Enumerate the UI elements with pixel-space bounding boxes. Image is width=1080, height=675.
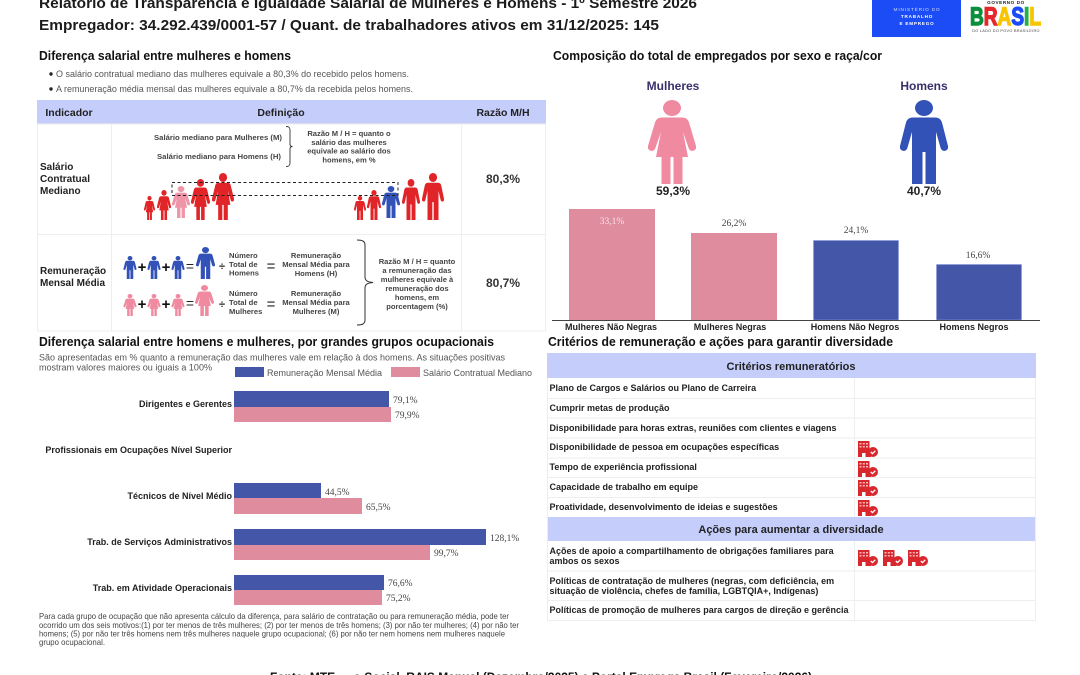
men share: 40,7% — [907, 184, 941, 198]
bar chart: composition: 24,1% — [844, 226, 868, 236]
footnote: ocorrido um dos seis motivos:(1) por ter menos de três mulheres; (2) por ter menos de três homens; (3) por não ter mulheres; (4) por não ter — [39, 620, 519, 630]
table header — [45, 107, 530, 119]
criteria list: Cumprir metas de produção — [550, 403, 670, 413]
footnote: homens; (5) por não ter três homens nem três mulheres naquele grupo ocupacional; (6) por não ter nem homens nem mulheres naquele — [39, 628, 505, 638]
title — [39, 0, 697, 34]
women share: 59,3% — [656, 184, 690, 198]
row label: remuneração mensal média: Mensal Média — [40, 278, 105, 289]
legend: Salário Contratual Mediano — [423, 367, 532, 378]
criteria list: Tempo de experiência profissional — [550, 462, 697, 472]
heading: composição: Composição do total de empregados por sexo e raça/cor — [553, 49, 882, 63]
group: Técnicos — [127, 483, 391, 514]
definition text: salário mediano: Salário mediano para Mulheres (M) — [154, 133, 282, 142]
formula: men: Total de — [229, 260, 258, 269]
heading: diferença salarial: Diferença salarial entre mulheres e homens — [39, 49, 291, 63]
formula: men: Homens — [229, 268, 259, 278]
group: Técnicos: Técnicos de Nível Médio — [127, 491, 232, 501]
women share — [647, 79, 700, 198]
criteria list — [550, 383, 836, 512]
formula: men: + — [138, 259, 147, 276]
definition text: salário mediano: Razão M / H = quanto o — [307, 129, 391, 138]
brace and ratio text: porcentagem (%) — [386, 302, 448, 311]
group: Dirigentes e Gerentes — [139, 391, 420, 422]
row label: salário contratual mediano: Contratual — [40, 174, 90, 185]
text block: chart explanation: mostram valores maiores ou iguais a 100% — [39, 362, 212, 372]
formula: men: Homens (H) — [295, 269, 338, 278]
formula: women: Total de — [229, 298, 258, 307]
actions list: Políticas de promoção de mulheres para cargos de direção e gerência — [550, 605, 849, 615]
text block: chart explanation: São apresentadas em % quanto a remuneração das mulheres vale em relação à dos homens. As situações positivas — [39, 352, 505, 362]
actions list: Ações de apoio a compartilhamento de obrigações familiares para — [550, 546, 835, 556]
group: Atividade Operacionais: 76,6% — [388, 579, 413, 589]
women share: Mulheres — [647, 79, 700, 93]
bar chart: composition — [552, 209, 1040, 332]
group: Dirigentes e Gerentes: 79,1% — [393, 396, 418, 406]
header: critérios remuneratórios: Critérios remuneratórios — [727, 361, 855, 373]
group: Serviços Administrativos: Trab. de Serviços Administrativos — [87, 537, 232, 547]
value: 80,7%: 80,7% — [486, 276, 520, 290]
group: Serviços Administrativos — [87, 529, 519, 560]
icon: family of men — [354, 173, 444, 220]
row label: salário contratual mediano — [40, 162, 90, 197]
definition text: salário mediano: equivale ao salário dos — [307, 146, 391, 156]
definition text: salário mediano — [154, 126, 391, 166]
footnote: grupo ocupacional. — [39, 637, 105, 647]
text block: bullets: A remuneração média mensal das mulheres equivale a 80,7% da recebida pelos homens. — [56, 83, 413, 94]
footnote: Para cada grupo de ocupação que não apresenta cálculo da diferença, para salário de contratação ou para remuneração média, pode ter — [39, 611, 509, 621]
group: Serviços Administrativos: 99,7% — [434, 549, 459, 559]
formula: men: ÷ — [219, 261, 225, 273]
formula: men — [123, 247, 351, 279]
actions list: ambos os sexos — [550, 556, 620, 566]
group: Atividade Operacionais: Trab. em Atividade Operacionais — [93, 583, 232, 593]
formula: men: = — [186, 258, 194, 274]
brace and ratio text: a remuneração das — [382, 266, 452, 275]
formula: women: ÷ — [219, 299, 225, 311]
logo: Governo do Brasil: GOVERNO DO — [987, 0, 1025, 5]
icon: employer check, criteria — [858, 441, 878, 516]
criteria list: Plano de Cargos e Salários ou Plano de Carreira — [550, 383, 757, 393]
bar chart: composition: 26,2% — [722, 219, 746, 229]
criteria list: Disponibilidade para horas extras, reuniões com clientes e viagens — [550, 423, 836, 433]
bar chart: occupational groups — [45, 391, 519, 605]
actions list: situação de violência, chefes de família, LGBTQIA+, Indígenas) — [550, 586, 818, 596]
median dashed box — [172, 182, 398, 196]
brace and ratio text — [357, 240, 456, 325]
logo: Ministério do Trabalho e Emprego: TRABALHO — [901, 14, 933, 19]
formula: men: Remuneração — [291, 251, 341, 260]
formula: women: + — [138, 296, 147, 313]
logo: Governo do Brasil: DO LADO DO POVO BRASILEIRO — [972, 29, 1040, 33]
row label: remuneração mensal média — [40, 266, 106, 289]
formula: men: + — [162, 259, 171, 276]
footnote — [39, 611, 519, 647]
group: Profissionais: Profissionais em Ocupações Nível Superior — [45, 445, 232, 455]
formula: women: Número — [229, 289, 258, 298]
brace and ratio text: Razão M / H = quanto — [379, 257, 456, 266]
value: 80,3%: 80,3% — [486, 172, 520, 186]
header: ações: Ações para aumentar a diversidade — [698, 524, 884, 536]
formula: women: Mulheres (M) — [293, 307, 340, 316]
men share — [900, 79, 948, 198]
criteria list: Capacidade de trabalho em equipe — [550, 482, 698, 492]
group: Serviços Administrativos: 128,1% — [490, 534, 519, 544]
logo: Ministério do Trabalho e Emprego: MINISTÉRIO DO — [894, 6, 940, 13]
criteria list: Proatividade, desenvolvimento de ideias e sugestões — [550, 502, 778, 512]
text block: bullets — [49, 68, 413, 94]
heading: grupos ocupacionais: Diferença salarial entre homens e mulheres, por grandes grupos ocupacionais — [39, 335, 494, 349]
brace and ratio text: mulheres equivale à — [381, 275, 454, 284]
men share: Homens — [900, 79, 948, 93]
actions list: Políticas de contratação de mulheres (negras, com deficiência, em — [550, 576, 834, 586]
icon: employer check, actions — [858, 550, 928, 566]
formula: men: Mensal Média para — [282, 260, 351, 269]
row label: salário contratual mediano: Mediano — [40, 186, 81, 197]
logo: Ministério do Trabalho e Emprego — [872, 0, 961, 37]
table header: Indicador — [45, 107, 93, 119]
heading: critérios: Critérios de remuneração e ações para garantir diversidade — [548, 335, 893, 349]
formula: women: Mensal Média para — [282, 298, 351, 307]
panel: criteria table — [547, 353, 1036, 620]
brace and ratio text: homens, em — [395, 293, 439, 302]
legend: Remuneração Mensal Média — [267, 367, 383, 378]
bar chart: composition: Homens Não Negros — [811, 322, 899, 332]
icon: family of women — [144, 173, 234, 220]
text block: chart explanation — [39, 352, 505, 372]
group: Dirigentes e Gerentes: Dirigentes e Gerentes — [139, 399, 232, 409]
formula: men: = — [267, 258, 276, 275]
formula: women: Mulheres — [229, 307, 262, 316]
definition text: salário mediano: homens, em % — [322, 156, 376, 164]
logo: Ministério do Trabalho e Emprego: E EMPREGO — [899, 21, 935, 26]
definition text: salário mediano: Salário mediano para Homens (H) — [157, 152, 281, 161]
row label: remuneração mensal média: Remuneração — [40, 266, 106, 277]
table header: Definição — [257, 107, 305, 119]
group: Técnicos: 65,5% — [366, 503, 391, 513]
formula: women: Remuneração — [291, 289, 341, 298]
formula: women: + — [162, 296, 171, 313]
criteria list: Disponibilidade de pessoa em ocupações específicas — [550, 442, 779, 452]
group: Atividade Operacionais: 75,2% — [386, 594, 411, 604]
legend — [235, 367, 532, 378]
bar chart: composition: 16,6% — [966, 251, 990, 261]
group: Dirigentes e Gerentes: 79,9% — [395, 411, 420, 421]
row label: salário contratual mediano: Salário — [40, 162, 73, 173]
brace and ratio text: remuneração dos — [385, 284, 449, 293]
group: Técnicos: 44,5% — [325, 488, 350, 498]
title: Empregador: 34.292.439/0001-57 / Quant. de trabalhadores ativos em 31/12/2025: 145 — [39, 17, 659, 34]
formula: men: Número — [229, 251, 258, 260]
formula: women — [123, 285, 351, 316]
group: Atividade Operacionais — [93, 575, 413, 605]
bar chart: composition: 33,1% — [600, 217, 624, 227]
bar chart: composition: Mulheres Não Negras — [565, 322, 657, 332]
formula: women: = — [186, 295, 194, 311]
table header: Razão M/H — [476, 107, 530, 119]
actions list — [550, 546, 849, 615]
formula: women: = — [267, 296, 276, 313]
definition text: salário mediano: salário das mulheres — [311, 138, 387, 147]
panel: indicator table — [37, 100, 546, 331]
bar chart: composition: Mulheres Negras — [694, 322, 766, 332]
text block: bullets: O salário contratual mediano das mulheres equivale a 80,3% do recebido pelos homens. — [56, 68, 409, 79]
bar chart: composition: Homens Negros — [939, 322, 1009, 332]
logo: Governo do Brasil: BRASIL — [970, 3, 1041, 31]
